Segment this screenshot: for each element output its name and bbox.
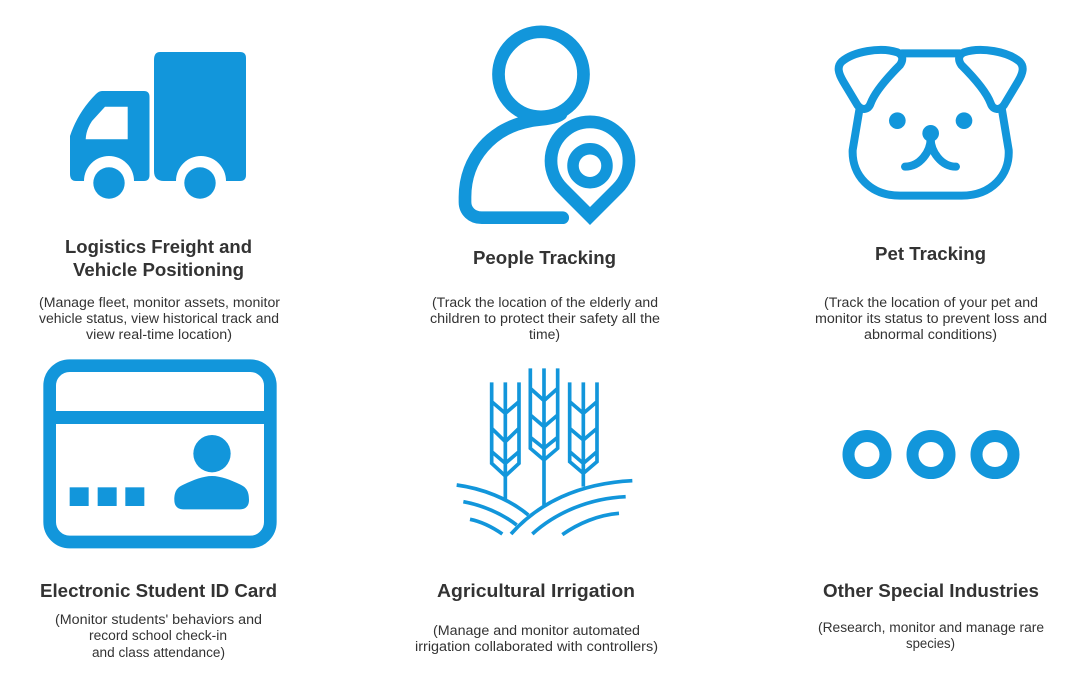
heading: people tracking: People Tracking bbox=[473, 247, 616, 268]
description: student id card bbox=[55, 612, 262, 660]
heading: student id card: Electronic Student ID Card bbox=[40, 580, 277, 601]
panel: people tracking bbox=[430, 32, 660, 342]
description: pet tracking bbox=[815, 295, 1047, 342]
description: pet tracking: (Track the location of your pet and bbox=[824, 295, 1038, 310]
description: other special industries: species) bbox=[906, 636, 955, 651]
panel: other special industries bbox=[818, 436, 1044, 651]
icon: dog face bbox=[839, 50, 1023, 196]
description: student id card: (Monitor students' behaviors and bbox=[55, 612, 262, 627]
description: other special industries: (Research, monitor and manage rare bbox=[818, 620, 1044, 635]
panel: logistics bbox=[39, 52, 281, 342]
description: student id card: record school check-in bbox=[89, 628, 227, 643]
description: other special industries bbox=[818, 620, 1044, 651]
icon: id card bbox=[50, 366, 270, 542]
panel: agricultural irrigation bbox=[415, 368, 658, 654]
description: people tracking: (Track the location of the elderly and bbox=[432, 295, 658, 310]
description: pet tracking: monitor its status to prevent loss and bbox=[815, 311, 1047, 326]
heading: pet tracking: Pet Tracking bbox=[875, 243, 986, 264]
description: student id card: and class attendance) bbox=[92, 645, 225, 660]
heading: logistics bbox=[65, 236, 252, 280]
icon: person with location pin bbox=[465, 32, 629, 218]
heading: logistics: Logistics Freight and bbox=[65, 236, 252, 257]
description: agricultural irrigation: (Manage and monitor automated bbox=[433, 623, 640, 638]
description: logistics: view real-time location) bbox=[86, 327, 232, 342]
panel: pet tracking bbox=[815, 50, 1047, 342]
description: agricultural irrigation bbox=[415, 623, 658, 654]
description: people tracking: time) bbox=[529, 327, 560, 342]
description: pet tracking: abnormal conditions) bbox=[864, 327, 997, 342]
description: agricultural irrigation: irrigation collaborated with controllers) bbox=[415, 639, 658, 654]
heading: other special industries: Other Special Industries bbox=[823, 580, 1039, 601]
icon: truck bbox=[70, 52, 246, 199]
description: logistics: (Manage fleet, monitor assets, monitor bbox=[39, 295, 281, 310]
description: logistics bbox=[39, 295, 281, 342]
panel: student id card bbox=[40, 366, 277, 660]
description: logistics: vehicle status, view historical track and bbox=[39, 311, 279, 326]
icon: three rings bbox=[848, 436, 1014, 473]
heading: logistics: Vehicle Positioning bbox=[73, 259, 244, 280]
heading: agricultural irrigation: Agricultural Irrigation bbox=[437, 580, 635, 601]
description: people tracking bbox=[430, 295, 660, 342]
description: people tracking: children to protect their safety all the bbox=[430, 311, 660, 326]
icon: wheat and fields bbox=[457, 368, 632, 535]
